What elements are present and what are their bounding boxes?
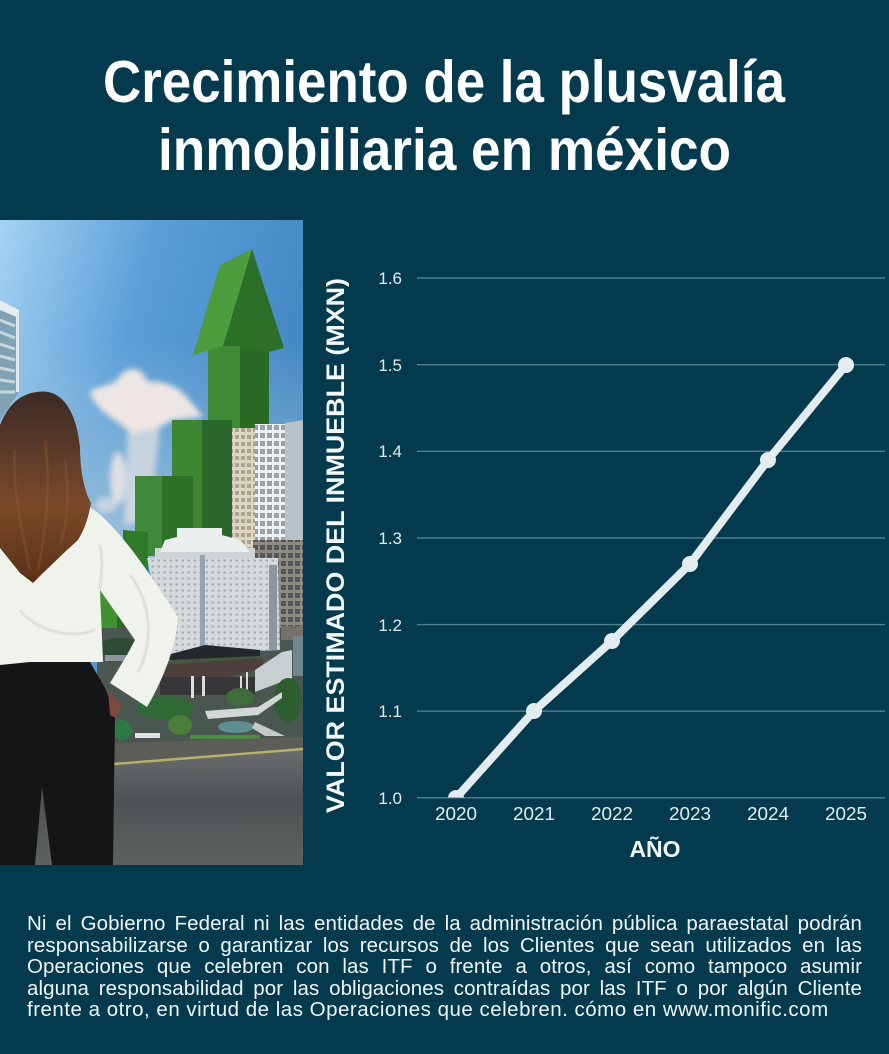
icon: clouds <box>90 369 203 525</box>
x axis labels: 2021 <box>513 804 555 824</box>
disclaimer text: alguna responsabilidad por las obligaciones contraídas por las ITF o por algún Cliente <box>27 976 862 1000</box>
icon: woman's long brown hair <box>0 391 91 583</box>
y axis labels: 1.0 <box>378 789 402 808</box>
disclaimer text <box>27 912 862 1021</box>
icon: left glass tower <box>0 300 19 420</box>
y axis labels: 1.5 <box>378 356 402 375</box>
y axis labels: 1.1 <box>378 702 402 721</box>
icon: wall and road <box>35 737 303 865</box>
icon: hand on hip <box>108 690 122 718</box>
title <box>103 49 786 183</box>
grid lines <box>417 278 885 798</box>
y axis labels: 1.6 <box>378 269 402 288</box>
x axis labels: 2023 <box>669 804 711 824</box>
x axis title: AÑO <box>629 835 681 862</box>
disclaimer text: Ni el Gobierno Federal ni las entidades de la administración pública paraestatal podrán <box>27 912 862 935</box>
y axis title: VALOR ESTIMADO DEL INMUEBLE (MXN) <box>322 278 350 813</box>
icon: woman's black trousers <box>0 662 115 865</box>
y axis labels: 1.2 <box>378 616 402 635</box>
x axis labels: 2025 <box>825 804 867 824</box>
icon: woman's white shirt <box>0 507 178 707</box>
x axis labels <box>435 804 867 824</box>
icon: trees and terrace behind the figure <box>97 628 303 748</box>
icon: green growth arrow with blocks <box>97 249 284 640</box>
x axis labels: 2020 <box>435 804 477 824</box>
y axis labels <box>378 269 402 808</box>
icon: gardens and plaza <box>112 678 302 740</box>
x axis labels: 2022 <box>591 804 633 824</box>
title: Crecimiento de la plusvalía <box>103 49 786 115</box>
line series <box>448 357 854 806</box>
y axis labels: 1.3 <box>378 529 402 548</box>
chart: estimated property value 2020-2025 <box>322 269 885 862</box>
title: inmobiliaria en méxico <box>158 117 731 183</box>
disclaimer text: Operaciones que celebren con las ITF o frente a otros, así como tampoco asumir <box>27 955 862 978</box>
disclaimer text: frente a otro, en virtud de las Operaciones que celebren. cómo en www.monific.com <box>27 998 829 1021</box>
y axis labels: 1.4 <box>378 442 402 461</box>
x axis labels: 2024 <box>747 804 789 824</box>
photo: woman looking at a city with a green growth arrow <box>0 220 303 865</box>
icon: large white hotel building <box>147 528 303 698</box>
disclaimer text: responsabilizarse o garantizar los recursos de los Clientes que sean utilizados en las <box>27 934 862 956</box>
icon: background towers <box>232 420 303 630</box>
